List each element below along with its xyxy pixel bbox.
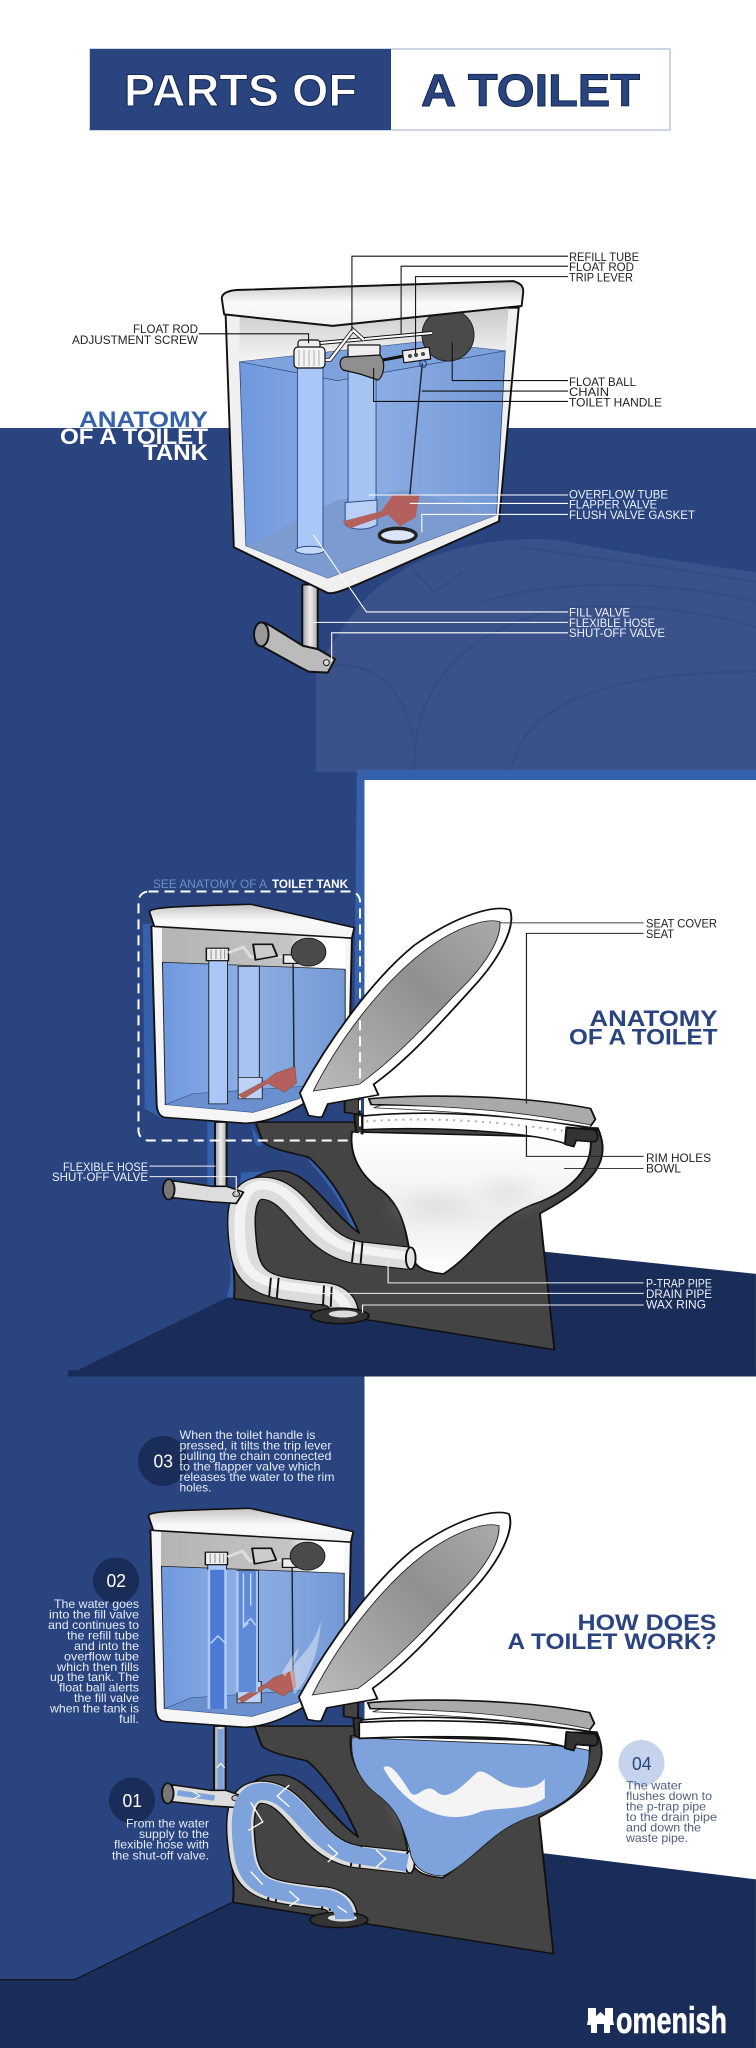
section 1 labels: FLUSH VALVE GASKET — [569, 508, 696, 522]
step 02: 02 — [106, 1571, 126, 1591]
step 01: the shut-off valve. — [112, 1848, 209, 1862]
section 1 labels: OVERFLOW TUBE — [569, 488, 668, 502]
trap pipe water — [241, 1792, 407, 1919]
section 1 labels: SHUT-OFF VALVE — [569, 626, 665, 640]
step 02: up the tank. The — [50, 1670, 139, 1684]
step 04 — [618, 1740, 717, 1845]
fill valve tube — [296, 366, 324, 554]
heading: how does a toilet work: A TOILET WORK? — [508, 1629, 716, 1654]
step 01: 01 — [122, 1791, 142, 1811]
step 03: to the flapper valve which — [180, 1460, 320, 1474]
section 2 labels: SHUT-OFF VALVE — [52, 1170, 148, 1184]
step 03: releases the water to the rim — [180, 1470, 334, 1484]
section 2 labels: WAX RING — [646, 1298, 706, 1312]
section 2 toilet illustration — [149, 904, 603, 1350]
flapper motion — [282, 1621, 321, 1694]
float ball — [422, 309, 474, 361]
tank lid — [222, 281, 523, 326]
step 02: the refill tube — [67, 1628, 139, 1642]
heading: anatomy of a toilet: ANATOMY — [590, 1006, 718, 1031]
heading: how does a toilet work — [508, 1610, 716, 1654]
step 03: pulling the chain connected — [180, 1449, 332, 1463]
overflow tube water — [236, 1571, 258, 1692]
step 02: which then fills — [56, 1660, 139, 1674]
title banner — [90, 49, 670, 130]
step 04: 04 — [632, 1754, 652, 1774]
step 02: and into the — [74, 1639, 139, 1653]
section 1 labels: CHAIN — [569, 385, 609, 399]
see anatomy callout — [138, 877, 360, 1140]
section 1 labels: REFILL TUBE — [569, 250, 639, 264]
step 02: the fill valve — [74, 1691, 139, 1705]
section 2 labels: FLEXIBLE HOSE — [63, 1160, 148, 1174]
step 01: flexible hose with — [114, 1838, 209, 1852]
flexible hose water — [217, 1729, 224, 1789]
fill valve cap — [294, 340, 325, 368]
chain — [410, 363, 422, 495]
section 2 labels: RIM HOLES — [646, 1151, 711, 1165]
tank body — [226, 307, 519, 593]
step 04: the p-trap pipe — [626, 1800, 706, 1814]
logo: homenish — [587, 2000, 727, 2041]
section 1 labels: FILL VALVE — [569, 606, 630, 620]
section 3 background: wall, white, floor — [0, 1370, 756, 2048]
section 1 blue background — [0, 428, 756, 773]
section 2 labels: BOWL — [646, 1162, 681, 1176]
section 2 wall shadow — [143, 770, 364, 1298]
step 03: When the toilet handle is — [180, 1428, 316, 1442]
step 01: From the water — [126, 1816, 209, 1830]
heading: anatomy of a toilet tank: OF A TOILET — [60, 424, 209, 449]
refill tube — [320, 330, 364, 360]
section 3 toilet illustration — [148, 1508, 602, 1954]
float rod — [320, 333, 432, 343]
water — [240, 351, 505, 578]
step 02 — [48, 1558, 139, 1726]
toilet handle — [340, 345, 384, 380]
flush valve gasket — [379, 528, 416, 542]
step 03: pressed, it tilts the trip lever — [180, 1438, 332, 1452]
white splash — [383, 1766, 545, 1817]
section 2 labels — [52, 916, 717, 1312]
step 02: and continues to — [48, 1618, 139, 1632]
section 1 tank diagram — [222, 281, 523, 673]
section 1 labels: ADJUSTMENT SCREW — [72, 333, 199, 347]
heading: anatomy of a toilet tank — [60, 407, 209, 465]
section 2 labels: DRAIN PIPE — [646, 1287, 712, 1301]
bowl water — [352, 1738, 589, 1876]
section 1 labels: FLOAT BALL — [569, 375, 636, 389]
ghost toilet background — [316, 539, 756, 772]
section 1 labels: TOILET HANDLE — [569, 396, 662, 410]
heading: anatomy of a toilet: OF A TOILET — [569, 1024, 718, 1050]
see anatomy callout: SEE ANATOMY OF A — [153, 877, 267, 891]
heading: how does a toilet work: HOW DOES — [578, 1610, 716, 1635]
section 2 labels: P-TRAP PIPE — [646, 1276, 712, 1290]
section 1 labels: FLOAT ROD — [569, 260, 634, 274]
step 01: supply to the — [139, 1827, 209, 1841]
step 04: flushes down to — [626, 1789, 712, 1803]
flapper valve — [342, 495, 419, 528]
section 3 water flow overlays — [177, 1570, 598, 1919]
step 04: and down the — [626, 1820, 701, 1834]
section 2 leader lines — [149, 923, 644, 1313]
title banner: PARTS OF — [124, 65, 357, 116]
section 1 labels — [72, 250, 696, 640]
step 02: when the tank is — [49, 1702, 139, 1716]
section 1 labels: FLAPPER VALVE — [569, 498, 657, 512]
fill valve water — [207, 1570, 227, 1709]
section 1 leader lines — [199, 256, 568, 662]
step 03: 03 — [154, 1452, 173, 1472]
rim — [359, 1721, 595, 1747]
section 1 labels: FLEXIBLE HOSE — [569, 616, 655, 630]
overflow tube — [345, 371, 377, 529]
section 2 labels: SEAT COVER — [646, 916, 717, 930]
title banner: A TOILET — [421, 65, 640, 116]
step 01 — [109, 1778, 209, 1862]
section 1 labels: TRIP LEVER — [569, 270, 633, 284]
trip lever — [383, 347, 431, 368]
section 2 labels: SEAT — [646, 927, 675, 941]
step 02: float ball alerts — [59, 1680, 139, 1694]
step 03 — [138, 1428, 334, 1494]
step 02: overflow tube — [64, 1650, 139, 1664]
step 02: into the fill valve — [49, 1608, 139, 1622]
see anatomy callout: TOILET TANK — [272, 877, 348, 891]
section 1 labels: FLOAT ROD — [133, 322, 198, 336]
step 02: full. — [119, 1712, 139, 1726]
step 04: to the drain pipe — [626, 1810, 717, 1824]
step 02: The water goes — [54, 1597, 139, 1611]
heading: anatomy of a toilet tank: TANK — [143, 440, 208, 465]
step 04: The water — [626, 1778, 682, 1792]
section 2 background: wall, strip, white, floor — [0, 770, 756, 1382]
heading: anatomy of a toilet — [569, 1006, 718, 1050]
heading: anatomy of a toilet tank: ANATOMY — [79, 407, 208, 432]
step 04: waste pipe. — [625, 1831, 688, 1845]
step 03: holes. — [180, 1480, 212, 1494]
shut-off valve and hose — [254, 585, 335, 673]
